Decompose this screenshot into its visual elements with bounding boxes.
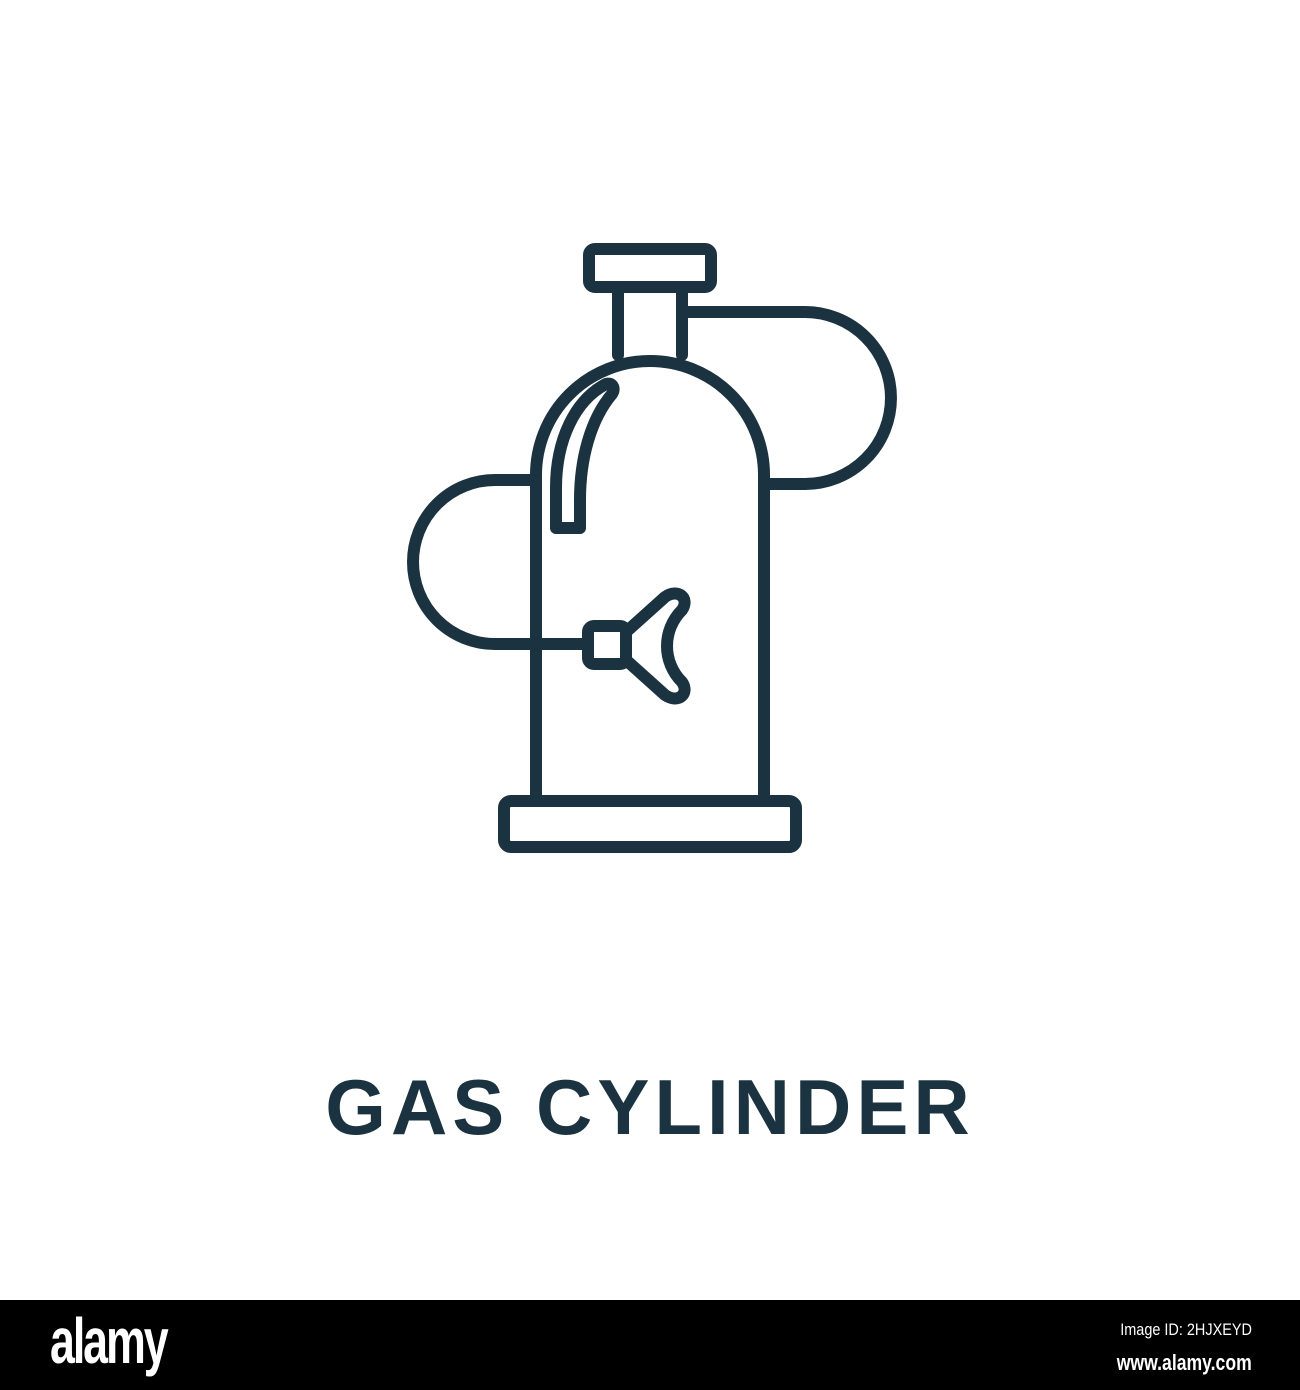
left hose: [413, 480, 588, 644]
right hose: [682, 312, 891, 484]
body: [536, 361, 764, 800]
title: GAS CYLINDER: [325, 1063, 975, 1151]
logo: alamy: [50, 1305, 167, 1377]
highlight: [556, 384, 614, 528]
image id: Image ID: 2HJXEYD: [1120, 1320, 1252, 1339]
valve: [588, 626, 626, 664]
cap: [589, 249, 711, 287]
icon: gas cylinder: [407, 243, 897, 853]
url: www.alamy.com: [1117, 1350, 1252, 1375]
base: [504, 801, 796, 847]
footer bar: [0, 1300, 1300, 1390]
neck: [618, 290, 682, 355]
